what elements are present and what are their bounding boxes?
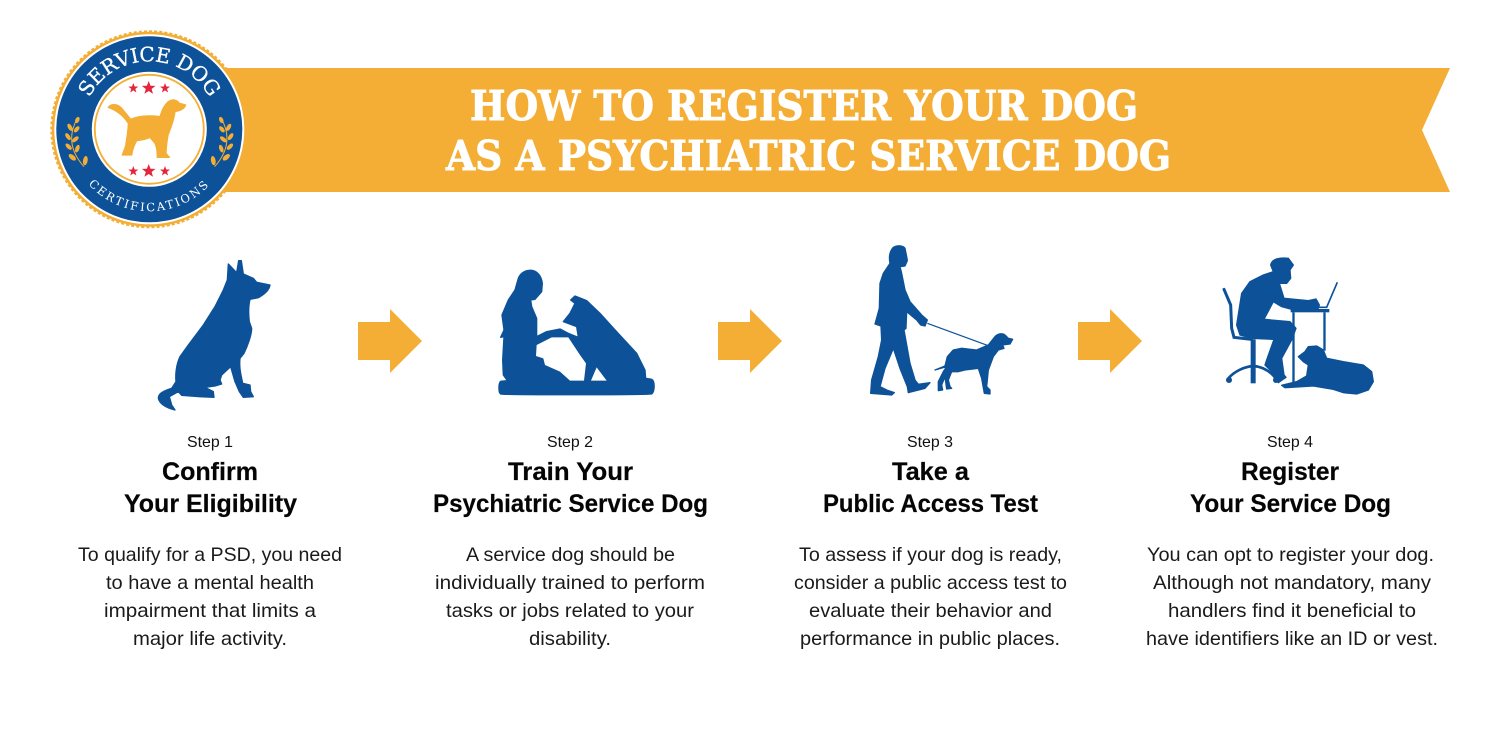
step 2 column: individually trained to perform [435,572,705,594]
step 2 column: A service dog should be [466,544,675,566]
step 3 column: evaluate their behavior and [809,600,1052,622]
logo laurel left [64,116,88,167]
step 1 column: major life activity. [133,628,287,650]
step 2 column: Psychiatric Service Dog [433,490,708,518]
step 4 column: Step 4 [1267,434,1313,451]
step 2 column: Step 2 [547,434,593,451]
logo laurel right [210,116,235,167]
step 3 column: Take a [892,458,970,486]
icon: man walking dog [871,246,1013,395]
step 4 column: Register [1241,458,1339,486]
step 4 column: You can opt to register your dog. [1147,544,1434,566]
arrow 3 [1078,309,1142,373]
step 2 column: disability. [529,628,611,650]
title [445,82,1171,180]
step 4 column: Although not mandatory, many [1153,572,1431,594]
step 2 column [433,434,708,650]
step 2 column: tasks or jobs related to your [446,600,695,622]
title: HOW TO REGISTER YOUR DOG [470,82,1138,130]
logo text: service dog: SERVICE DOG [78,46,220,96]
step 1 column: Confirm [162,458,258,486]
step 3 column [794,434,1067,650]
step 1 column: Your Eligibility [124,490,297,518]
arrow 2 [718,309,782,373]
icon: man at laptop with dog [1224,258,1373,394]
step 4 column: handlers find it beneficial to [1168,600,1416,622]
step 1 column: To qualify for a PSD, you need [78,544,342,566]
step 3 column: performance in public places. [800,628,1060,650]
step 4 column [1146,434,1438,650]
icon: sitting dog [158,261,270,410]
step 1 column: Step 1 [187,434,233,451]
icon: woman with dog [499,270,654,395]
logo text: certifications: CERTIFICATIONS [90,180,208,212]
step 1 column [78,434,342,650]
step 3 column: To assess if your dog is ready, [799,544,1062,566]
step 3 column: Public Access Test [823,490,1039,518]
step 2 column: Train Your [508,458,633,486]
logo dog [108,100,186,157]
step 1 column: impairment that limits a [104,600,316,622]
logo stars [128,81,170,177]
step 4 column: have identifiers like an ID or vest. [1146,628,1438,650]
step 3 column: Step 3 [907,434,953,451]
arrow 1 [358,309,422,373]
step 4 column: Your Service Dog [1190,490,1391,518]
step 1 column: to have a mental health [106,572,314,594]
logo badge [50,30,244,228]
title: AS A PSYCHIATRIC SERVICE DOG [445,132,1171,180]
banner ribbon [225,68,1450,192]
step 3 column: consider a public access test to [794,572,1067,594]
